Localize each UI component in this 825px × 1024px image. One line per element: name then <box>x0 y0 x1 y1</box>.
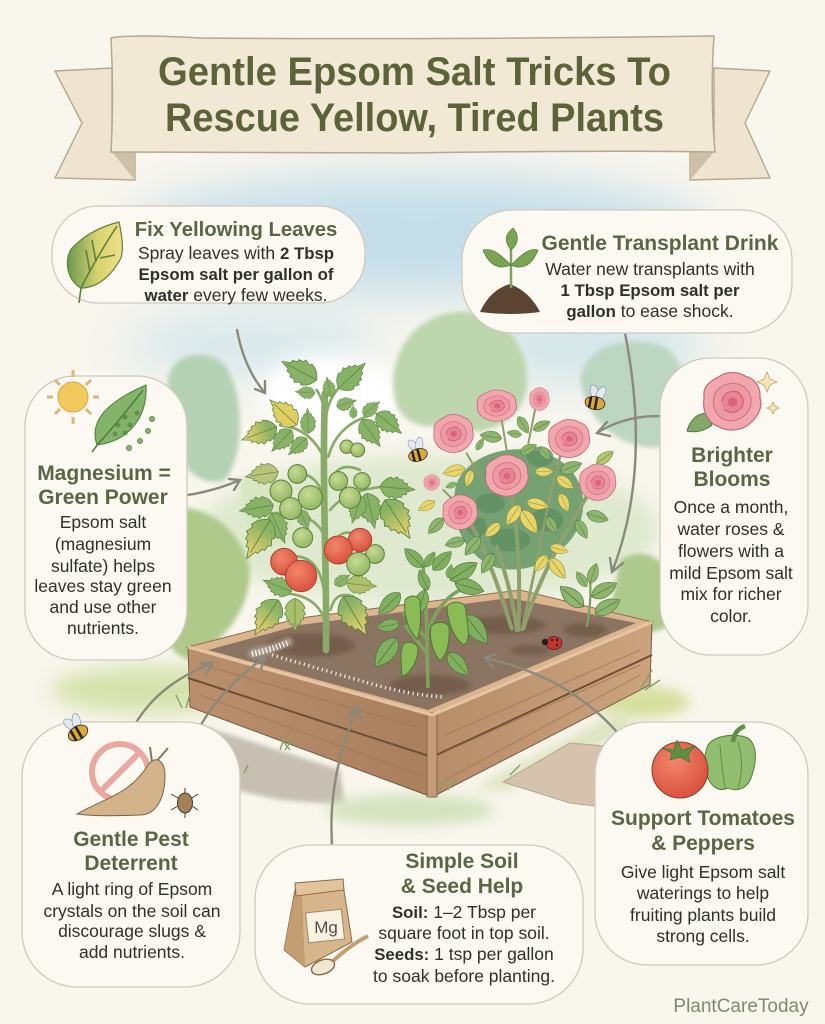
icon: bee <box>59 710 91 744</box>
ribbon tail right <box>690 68 770 180</box>
arrow: soil <box>331 707 361 857</box>
body: Epsom salt per gallon of <box>139 265 334 284</box>
icon: epsom bag and spoon <box>284 879 368 978</box>
body: Epsom salt <box>60 512 146 532</box>
icon: pepper <box>705 726 755 790</box>
epsom crystals <box>250 640 292 654</box>
icon: leaf with dots <box>92 385 154 452</box>
body: and use other <box>49 597 157 617</box>
right bed wall <box>432 622 652 797</box>
pepper plant <box>368 544 494 688</box>
arrow: transplant <box>610 333 636 572</box>
body: water every few weeks. <box>145 285 327 305</box>
icon: rose <box>687 372 779 432</box>
arrow: yellow leaves <box>237 330 265 393</box>
body: fruiting plants build <box>630 905 776 925</box>
body: gallon to ease shock. <box>566 301 734 321</box>
body: sulfate) helps <box>51 556 155 576</box>
body: add nutrients. <box>79 942 185 962</box>
heading: & Seed Help <box>401 875 523 898</box>
card: brighter blooms <box>660 358 808 655</box>
body: flowers with a <box>678 541 784 561</box>
parchment <box>111 36 715 153</box>
peppers <box>401 596 468 677</box>
card: gentle transplant drink <box>462 210 792 333</box>
background trees <box>150 312 688 660</box>
roses <box>434 415 473 452</box>
icon: sun <box>47 370 99 424</box>
arrow: blooms <box>597 416 675 436</box>
card: simple soil and seed help <box>255 845 583 1004</box>
stems <box>272 388 383 650</box>
body: mix for richer <box>680 584 782 604</box>
card: gentle pest deterrent <box>22 710 240 987</box>
leaves <box>368 544 494 680</box>
watermark: PlantCareToday <box>673 996 809 1017</box>
title text: Gentle Epsom Salt Tricks To <box>158 50 671 94</box>
heading: Simple Soil <box>405 850 519 873</box>
title banner <box>55 36 770 180</box>
foliage mass <box>454 449 583 570</box>
card: magnesium <box>25 370 187 660</box>
soil patches <box>265 616 607 695</box>
heading: & Peppers <box>651 832 755 855</box>
body: nutrients. <box>67 618 139 638</box>
heading: Brighter <box>691 444 773 467</box>
arrow: magnesium <box>168 479 240 497</box>
icon: epsom bag and spoon: Mg <box>314 918 338 937</box>
body: Seeds: 1 tsp per gallon <box>374 944 554 964</box>
title banner: Rescue Yellow, Tired Plants <box>165 96 664 140</box>
body: Once a month, <box>674 497 788 517</box>
card: support tomatoes and peppers <box>595 722 808 965</box>
leaves <box>234 350 422 643</box>
body: color. <box>710 606 752 626</box>
small seedling <box>555 562 623 627</box>
ground and path <box>200 725 345 805</box>
heading: Gentle Pest <box>73 828 189 851</box>
rose bush <box>416 387 616 630</box>
soil <box>208 598 636 710</box>
heading: Blooms <box>693 468 771 491</box>
body: 1 Tbsp Epsom salt per <box>560 281 740 300</box>
body: leaves stay green <box>34 576 172 596</box>
left bed wall <box>188 647 432 797</box>
heading: Fix Yellowing Leaves <box>135 219 337 241</box>
body: Give light Epsom salt <box>621 862 785 882</box>
heading: Deterrent <box>84 852 178 875</box>
ribbon tail left <box>55 68 135 180</box>
canes <box>443 410 587 630</box>
body: Spray leaves with 2 Tbsp <box>138 243 334 263</box>
icon: tomato <box>652 740 708 798</box>
bee near tomato <box>404 435 429 463</box>
body: (magnesium <box>55 534 151 554</box>
ladybug <box>542 636 562 650</box>
leaves <box>425 414 616 576</box>
card: fix yellowing leaves <box>52 206 365 305</box>
icon: seedling <box>480 228 540 314</box>
body: Water new transplants with <box>545 259 755 279</box>
body: mild Epsom salt <box>669 563 793 583</box>
heading: Gentle Transplant Drink <box>542 232 779 255</box>
arrows <box>132 330 675 857</box>
body: Soil: 1–2 Tbsp per <box>392 902 536 922</box>
body: crystals on the soil can <box>43 901 221 921</box>
tomato plant <box>234 350 422 650</box>
raised garden bed <box>176 590 660 797</box>
icon: yellow leaf <box>67 222 122 303</box>
heading: Magnesium = <box>37 462 171 485</box>
icon: no slug <box>77 744 168 816</box>
arrow: pest 1 <box>132 663 213 730</box>
green tomatoes <box>270 440 384 563</box>
body: strong cells. <box>656 926 750 946</box>
grass tufts <box>176 670 660 790</box>
red tomatoes <box>271 528 372 592</box>
arrow: pest 2 <box>186 657 265 758</box>
bee near roses <box>584 383 609 411</box>
body: A light ring of Epsom <box>52 879 212 899</box>
body: discourage slugs & <box>58 921 206 941</box>
icon: beetle <box>171 788 198 818</box>
rim <box>188 590 652 715</box>
body: waterings to help <box>636 883 769 903</box>
body: square foot in top soil. <box>378 923 550 943</box>
heading: Green Power <box>38 486 168 509</box>
body: water roses & <box>677 519 785 539</box>
heading: Support Tomatoes <box>611 807 795 830</box>
body: to soak before planting. <box>373 966 555 986</box>
arrow: tomatoes <box>485 654 637 758</box>
